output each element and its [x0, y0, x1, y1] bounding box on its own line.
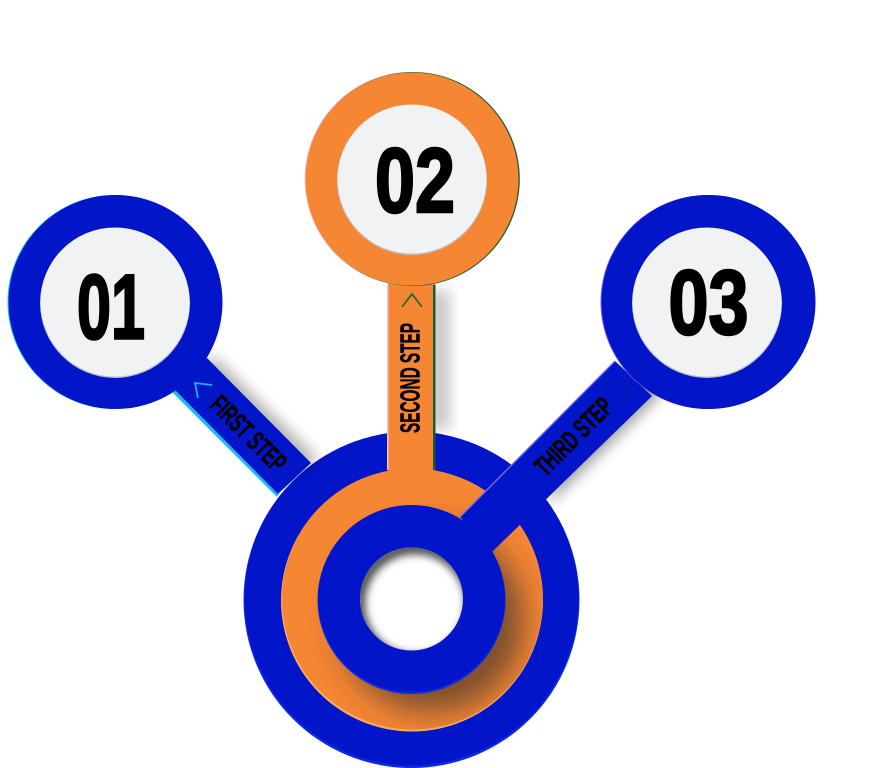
white disc 02 — [337, 105, 487, 255]
circle 03 — [600, 195, 816, 409]
number 02: 02 — [375, 130, 455, 232]
arm: second step — [387, 280, 450, 480]
inner blue ring and third step arm — [318, 360, 660, 694]
white disc 01 — [40, 228, 190, 378]
label: second step: SECOND STEP — [394, 323, 425, 433]
centre hole — [360, 548, 463, 650]
label: third step: THIRD STEP — [528, 391, 619, 482]
circle 01 — [8, 195, 222, 409]
number 01: 01 — [77, 256, 145, 358]
chevron: first step — [195, 383, 212, 398]
orange ring — [281, 468, 543, 732]
arm: first step — [173, 356, 318, 497]
chevron: second step — [402, 294, 422, 307]
number 03: 03 — [668, 252, 748, 354]
circle 02 — [304, 72, 520, 286]
base disc — [244, 432, 580, 768]
chevron: third step — [613, 383, 627, 398]
white disc 03 — [632, 228, 782, 378]
label: first step: FIRST STEP — [204, 389, 293, 478]
